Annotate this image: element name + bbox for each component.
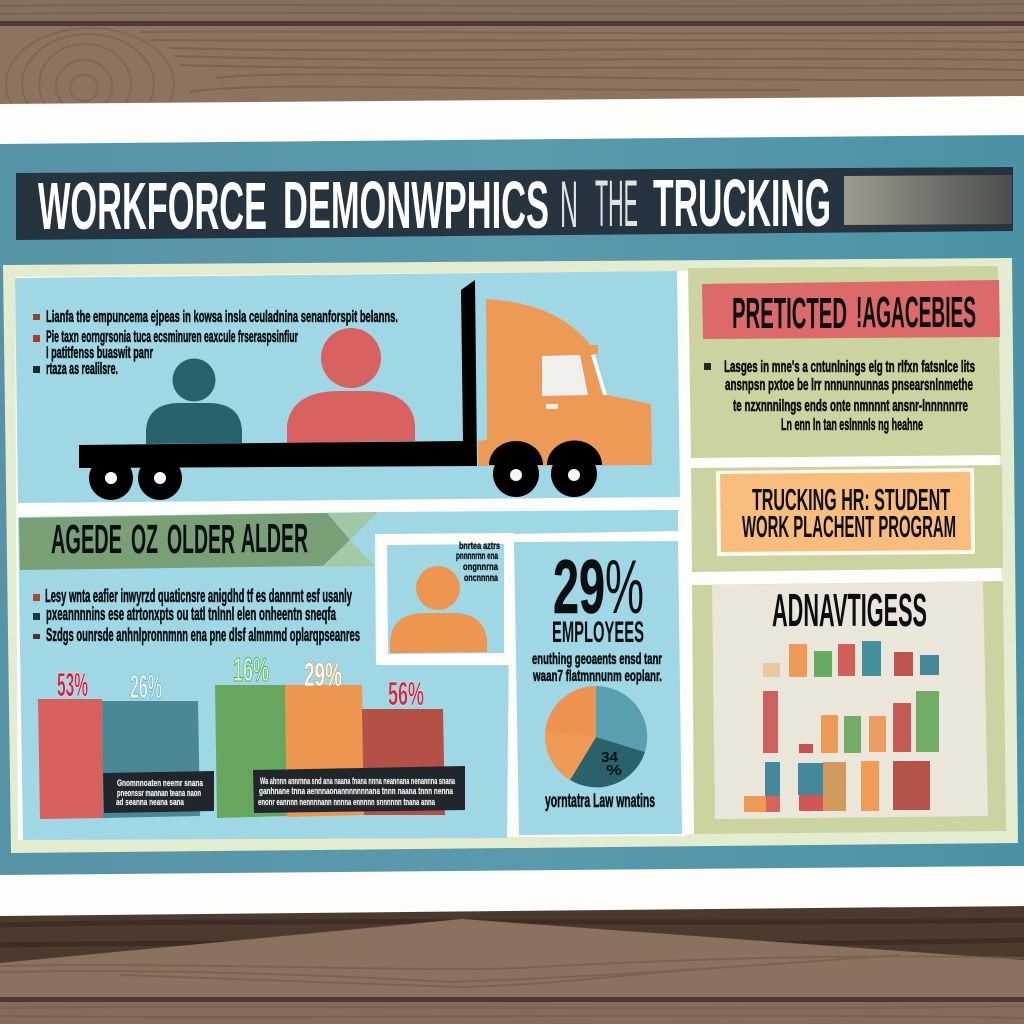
panel: student program [691,465,1003,572]
red banner [702,280,1000,339]
bar values: 56% [388,675,424,712]
body text [704,357,975,434]
bar chart row 1 [763,641,939,677]
bullet list [33,307,398,378]
pie caption: yorntatra Law wnatins [545,791,655,812]
dark caption left [103,771,214,813]
icon: orange person [390,566,487,653]
bullet list: I patitfenss buaswit panr [46,343,153,362]
bar values: 53% [57,666,88,703]
small note: bnrtea aztrs [459,541,500,552]
teal poster panel [0,135,1024,875]
bar chart row 2 [763,691,939,753]
icon: truck [79,280,652,500]
age banner: OLDER [167,516,235,562]
description [532,651,662,685]
bar values [57,651,424,712]
pie chart [545,686,647,787]
dark caption left: pneonssr mannan teana naon [117,788,201,798]
icon: teal person [146,358,242,444]
bullet list: Pie taxn eorngrsonia tuca ecsminuren eaxcule frseraspsinfiur [46,327,298,346]
title: N [560,167,578,241]
bullet list: Szdgs ounrsde anhnlpronnmnn ena pne dlsf almmmd oplarqpseanres [46,625,360,645]
title bar [16,166,1013,244]
age banner: AGEDE [51,516,122,562]
age banner [19,512,378,570]
panel: truck illustration [15,271,680,503]
pie chart: 34 [601,749,619,766]
title: TRUCKING [653,166,831,241]
small note: oncnnnna [464,573,498,584]
bar chart row 3 [744,761,930,812]
panel: employee statistic [514,541,682,835]
dark caption right: ganhnane tnna aennnaonannnnnnnana tnnn naana tnnn nenna [259,786,454,796]
dark caption right [253,766,465,813]
bar values: 16% [233,651,269,688]
panel: employee statistic: EMPLOYEES [552,616,644,649]
dark caption right: enonr eannnn nennnnann nnnna ennnnn snnnnnn tnana anna [258,797,436,807]
title: THE [595,166,638,240]
big number: 29 [553,545,605,630]
title: WORKFORCE [38,169,267,244]
panel: advantages chart [692,581,1006,834]
white gutters [15,268,1003,840]
panel: photo card [375,533,514,665]
description: enuthing geoaents ensd tanr [532,651,662,668]
bar values: 29% [304,656,342,693]
bullet list: Lianfa the empuncema ejpeas in kowsa insla ceuladnina senanforspit belanns. [46,307,398,326]
bullet list: Lesy wnta eafier inwyrzd quaticnsre anigdhd tf es dannrnt esf usanly [45,586,352,606]
cream content frame [3,258,1018,853]
age banner: OZ [131,516,158,562]
bullet list [33,586,360,645]
dark caption left: ad seanna neana sana [116,797,185,807]
bar chart: age shares [38,651,465,819]
dark caption left: Gnomnnoaten neemr snana [117,778,204,788]
dark caption right: Wa ahnnn annrnna snd ana naana fnana nnna neannana nenannna snana [260,776,456,786]
age banner: ALDER [241,515,308,561]
panel: predicted agencies [688,266,1001,458]
title [38,166,831,244]
bar values: 26% [130,668,162,705]
bullet list: rtaza as realilsre. [46,359,118,378]
panel: age section [18,510,678,840]
bullet list: pxeannnnins ese atrtonxpts ou tatl tnlnnl elen onheentn sneqfa [46,604,337,624]
small note: ongnnrna [463,562,498,573]
title: DEMONWPHICS [283,168,549,243]
description: waan7 flatmnnunm eoplanr. [532,668,662,685]
icon: red person [287,328,415,443]
pie chart: % [606,762,622,779]
small note: pnnnnrnn ena [456,551,498,562]
heading: PRETICTED [732,289,847,338]
big number: % [605,545,644,630]
small note [456,541,500,584]
